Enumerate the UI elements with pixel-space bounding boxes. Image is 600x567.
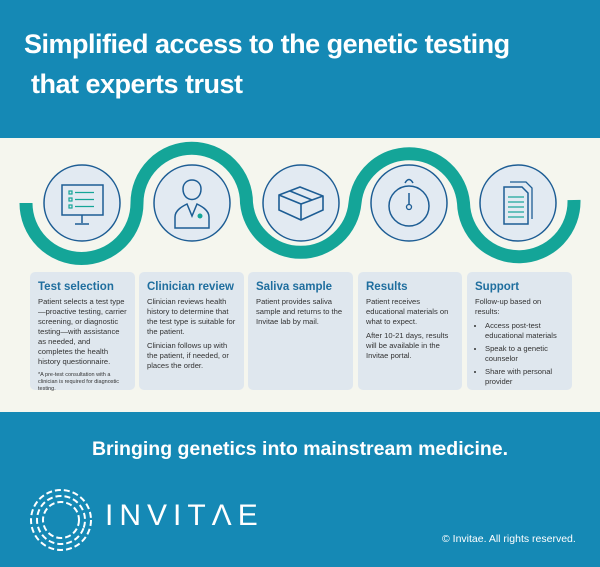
card: saliva sample (248, 272, 353, 390)
card: test selection: *A pre-test consultation with a clinician is required for diagnostic testing. (38, 372, 119, 392)
card: saliva sample: Saliva sample (256, 281, 332, 293)
icon: stopwatch (371, 165, 447, 241)
wordmark: INVITΛE (105, 499, 264, 532)
card: results: Results (366, 281, 408, 293)
card: results: After 10-21 days, results will be available in the Invitae portal. (366, 331, 448, 360)
card: clinician review: Clinician reviews health history to determine that the test type is suitable for the patient. (147, 297, 235, 336)
title: that experts trust (31, 69, 243, 99)
card: results: Patient receives educational materials on what to expect. (366, 297, 448, 326)
icon: monitor checklist (44, 165, 120, 241)
card: clinician review: Clinician review (147, 281, 234, 293)
card: saliva sample: Patient provides saliva sample and returns to the Invitae lab by mail. (256, 297, 342, 326)
icon: clinician (154, 165, 230, 241)
card: support (467, 272, 572, 390)
copyright: © Invitae. All rights reserved. (442, 533, 576, 545)
card: test selection (30, 272, 135, 390)
wave with icons (20, 142, 580, 265)
card: support: Follow-up based on results: (475, 297, 541, 316)
card: test selection: Test selection (38, 281, 114, 293)
card: results (358, 272, 462, 390)
card: support: Share with personal provider (485, 367, 552, 386)
card: support: Support (475, 281, 519, 293)
footer band (0, 412, 600, 567)
card: support: Speak to a genetic counselor (485, 344, 548, 363)
title: Simplified access to the genetic testing (24, 29, 510, 59)
tagline: Bringing genetics into mainstream medicine. (92, 438, 508, 460)
card: support: Access post-test educational materials (485, 321, 557, 340)
card: test selection: Patient selects a test type—proactive testing, carrier screening, or diagnostic testing—with assistance as needed, and completes the health history questionnaire. (38, 297, 127, 366)
card: clinician review: Clinician follows up with the patient, if needed, or places the order. (147, 341, 229, 370)
icon: swirl (30, 489, 92, 551)
title (24, 29, 510, 99)
card: clinician review (139, 272, 244, 390)
icon: documents (480, 165, 556, 241)
icon: box (263, 165, 339, 241)
logo (30, 489, 264, 551)
header band (0, 0, 600, 138)
